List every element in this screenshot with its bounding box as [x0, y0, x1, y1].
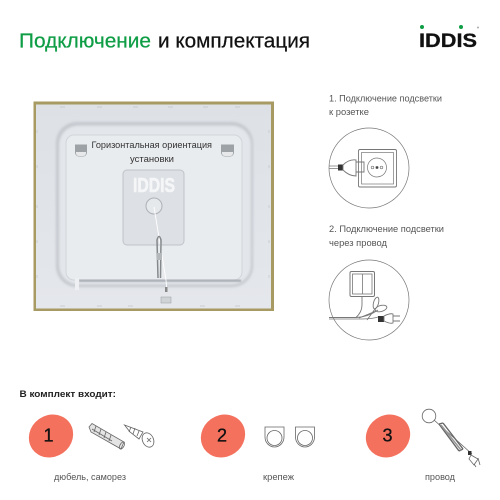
recess outer: [56, 122, 253, 287]
icon: socket and plug: [329, 128, 409, 208]
number badge 3: 3: [382, 426, 393, 446]
mirror frame: [34, 102, 274, 311]
label: дюбель, саморез: [54, 472, 126, 482]
right bracket: [221, 144, 234, 156]
label: крепеж: [263, 472, 294, 482]
panel: mirror back view: [34, 102, 274, 311]
icon: dowel: [89, 424, 126, 450]
step 2 caption: через провод: [329, 238, 388, 248]
icon: switch, scissors and plug: [329, 260, 409, 340]
kit heading: В комплект входит:: [20, 389, 116, 400]
edge marks: [37, 107, 269, 306]
step 2 caption: 2. Подключение подсветки: [329, 224, 444, 234]
kit item 3: [357, 406, 480, 482]
title: [19, 30, 310, 52]
step 1 caption: к розетке: [329, 107, 369, 117]
step 2 caption: [329, 224, 444, 248]
title: и комплектация: [158, 30, 310, 52]
step 1 caption: [329, 94, 442, 117]
embossed logo: IDDIS: [133, 175, 175, 197]
kit item 1: [20, 406, 156, 482]
number badge 1: 1: [43, 426, 54, 446]
logo: iddis: [419, 25, 479, 52]
icon: screw: [124, 425, 156, 449]
title: Подключение: [19, 30, 151, 52]
kit item 2: [192, 406, 314, 482]
logo: iddis: IDDIS: [419, 31, 477, 52]
raised inner plate: [66, 135, 242, 280]
panel caption: Горизонтальная ориентация: [92, 140, 212, 150]
panel caption: [92, 140, 212, 164]
left bracket: [75, 144, 87, 156]
mirror back panel: [36, 104, 271, 308]
cable: [154, 207, 171, 303]
icon: left bracket: [265, 427, 284, 447]
step 1 caption: 1. Подключение подсветки: [329, 94, 442, 104]
label: провод: [425, 472, 456, 482]
icon: right bracket: [296, 427, 314, 447]
icon: cable: [422, 409, 480, 467]
cable hole: [146, 198, 162, 214]
center recess: [123, 170, 184, 245]
number badge 2: 2: [217, 426, 227, 446]
panel caption: установки: [130, 154, 174, 164]
